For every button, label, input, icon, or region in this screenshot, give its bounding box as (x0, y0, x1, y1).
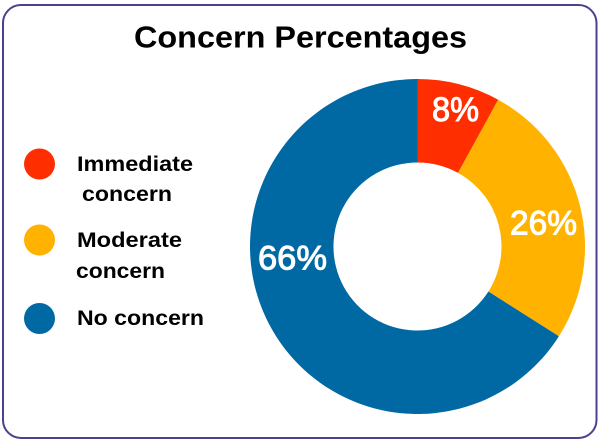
legend item: moderate concern: concern (76, 260, 165, 283)
legend item: immediate concern: Immediate (77, 153, 193, 176)
legend item: no concern: No concern (77, 307, 204, 330)
segment: 8% immediate concern: 8% (432, 91, 479, 129)
segment: 26% moderate concern: 26% (510, 204, 577, 242)
legend item: moderate concern (24, 224, 182, 283)
legend (24, 148, 204, 334)
legend item: immediate concern (24, 148, 193, 206)
legend item: no concern (24, 303, 204, 334)
legend item: moderate concern: Moderate (77, 229, 182, 252)
donut chart (250, 79, 585, 414)
legend item: immediate concern: concern (82, 183, 172, 206)
title: Concern Percentages (134, 20, 467, 54)
segment: 26% moderate concern (458, 100, 585, 336)
segment: 8% immediate concern (418, 79, 498, 173)
segment: 66% no concern: 66% (258, 240, 327, 278)
